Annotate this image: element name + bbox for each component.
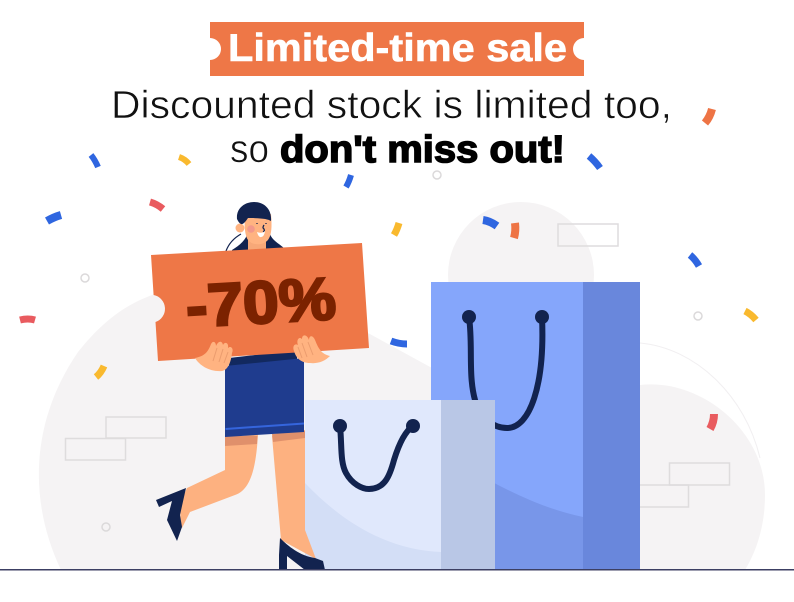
banner: limited-time sale — [210, 22, 584, 76]
banner text: Limited-time sale — [228, 27, 567, 70]
background blobs — [39, 202, 765, 570]
right shoe — [279, 538, 325, 570]
discount value: -70% — [184, 265, 338, 340]
brick outlines — [66, 224, 730, 507]
ear — [236, 224, 244, 232]
right hand — [293, 335, 330, 363]
small pale shopping bag — [305, 400, 495, 570]
ground line — [0, 569, 794, 570]
skirt — [225, 358, 304, 437]
face — [245, 214, 272, 244]
left leg — [180, 434, 258, 528]
headline line two: so — [230, 128, 269, 171]
right leg — [272, 430, 316, 559]
skirt shadow on legs — [225, 431, 305, 446]
cheek — [247, 225, 255, 233]
woman holding discount ticket — [151, 202, 369, 570]
left shoe — [156, 488, 186, 541]
discount ticket — [151, 243, 369, 361]
large blue shopping bag — [431, 282, 640, 570]
neck — [248, 236, 266, 256]
headline line two: don't miss out! — [280, 129, 565, 171]
headline line one: Discounted stock is limited too, — [111, 84, 672, 127]
hair strand — [226, 234, 241, 251]
skirt stripe — [226, 424, 304, 429]
eyes and nose — [257, 223, 266, 232]
hair behind shoulders — [232, 232, 284, 256]
confetti — [20, 109, 756, 429]
left hand — [195, 342, 233, 371]
smile — [257, 231, 265, 237]
fringe and hair top — [237, 202, 271, 224]
small ring decorations — [81, 171, 702, 531]
torso band — [229, 350, 297, 368]
